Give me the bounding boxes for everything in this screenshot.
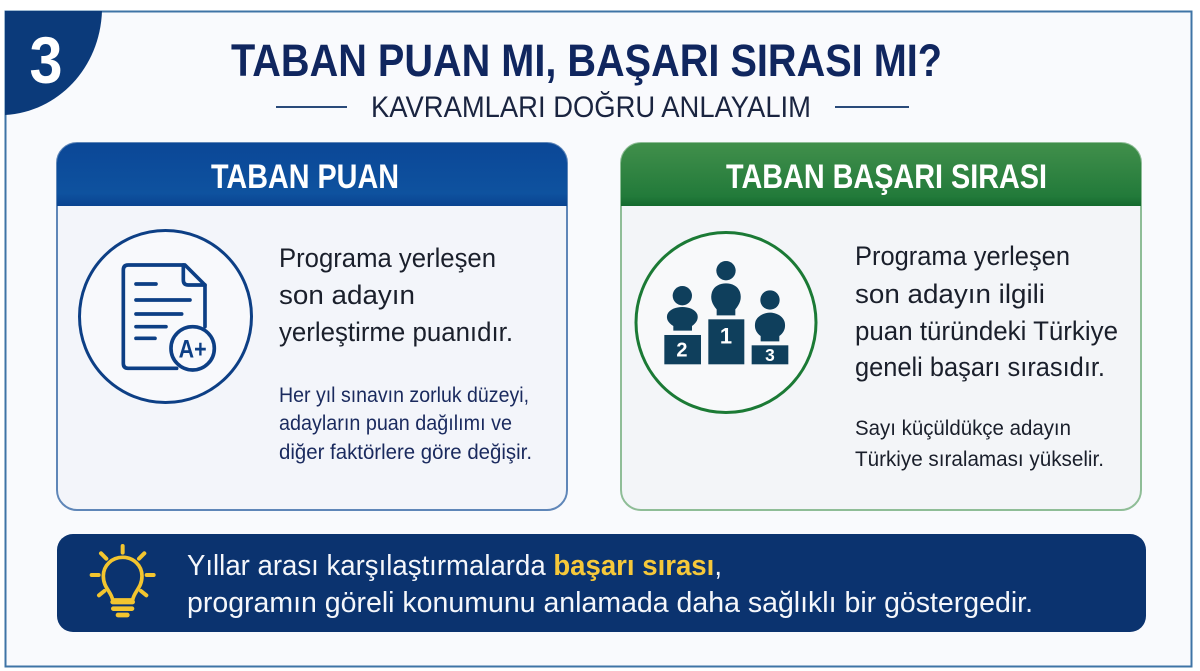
- note: taban basari sirasi: Sayı küçüldükçe adayın: [855, 417, 1071, 440]
- callout text: Yıllar arası karşılaştırmalarda başarı sırası,: [187, 550, 722, 582]
- note: taban puan: Her yıl sınavın zorluk düzeyi,: [279, 384, 529, 407]
- icon: podium with three people: [636, 232, 816, 412]
- main text: taban puan: [279, 243, 513, 347]
- main text: taban basari sirasi: son adayın ilgili: [855, 279, 1045, 309]
- callout text: [187, 550, 1033, 619]
- note: taban puan: diğer faktörlere göre değişir.: [279, 441, 532, 464]
- note: taban basari sirasi: Türkiye sıralaması yükselir.: [855, 448, 1104, 471]
- panel header: [57, 143, 567, 206]
- panel header: [621, 143, 1141, 206]
- panel header: TABAN BAŞARI SIRASI: [726, 158, 1047, 196]
- main text: taban basari sirasi: Programa yerleşen: [855, 241, 1070, 271]
- panel body: [621, 143, 1141, 510]
- icon: light bulb: [92, 546, 154, 615]
- note: taban puan: adayların puan dağılımı ve: [279, 412, 512, 435]
- subtitle: KAVRAMLARI DOĞRU ANLAYALIM: [371, 91, 811, 124]
- main text: taban puan: son adayın: [279, 280, 415, 310]
- main text: taban puan: yerleştirme puanıdır.: [279, 317, 513, 347]
- number badge: [5, 11, 102, 115]
- note: taban basari sirasi: [855, 417, 1104, 471]
- main text: taban puan: Programa yerleşen: [279, 243, 496, 273]
- note: taban puan: [279, 384, 532, 464]
- number badge: 3: [30, 23, 62, 97]
- callout text: programın göreli konumunu anlamada daha sağlıklı bir göstergedir.: [187, 587, 1033, 619]
- icon: podium with three people: 3: [765, 345, 775, 365]
- panel header: TABAN PUAN: [211, 158, 399, 196]
- main text: taban basari sirasi: geneli başarı sırasıdır.: [855, 352, 1105, 382]
- main text: taban basari sirasi: puan türündeki Türkiye: [855, 316, 1118, 346]
- icon: document with A+ grade: [80, 230, 252, 402]
- panel: taban basari sirasi: [621, 143, 1141, 510]
- icon: podium with three people: 1: [720, 323, 732, 348]
- callout banner: [57, 534, 1146, 632]
- title: TABAN PUAN MI, BAŞARI SIRASI MI?: [231, 35, 942, 86]
- panel body: [57, 143, 567, 510]
- icon: podium with three people: 2: [676, 339, 688, 361]
- panel: taban puan: [57, 143, 567, 510]
- icon: document with A+ grade: A+: [179, 335, 207, 363]
- main text: taban basari sirasi: [855, 241, 1118, 382]
